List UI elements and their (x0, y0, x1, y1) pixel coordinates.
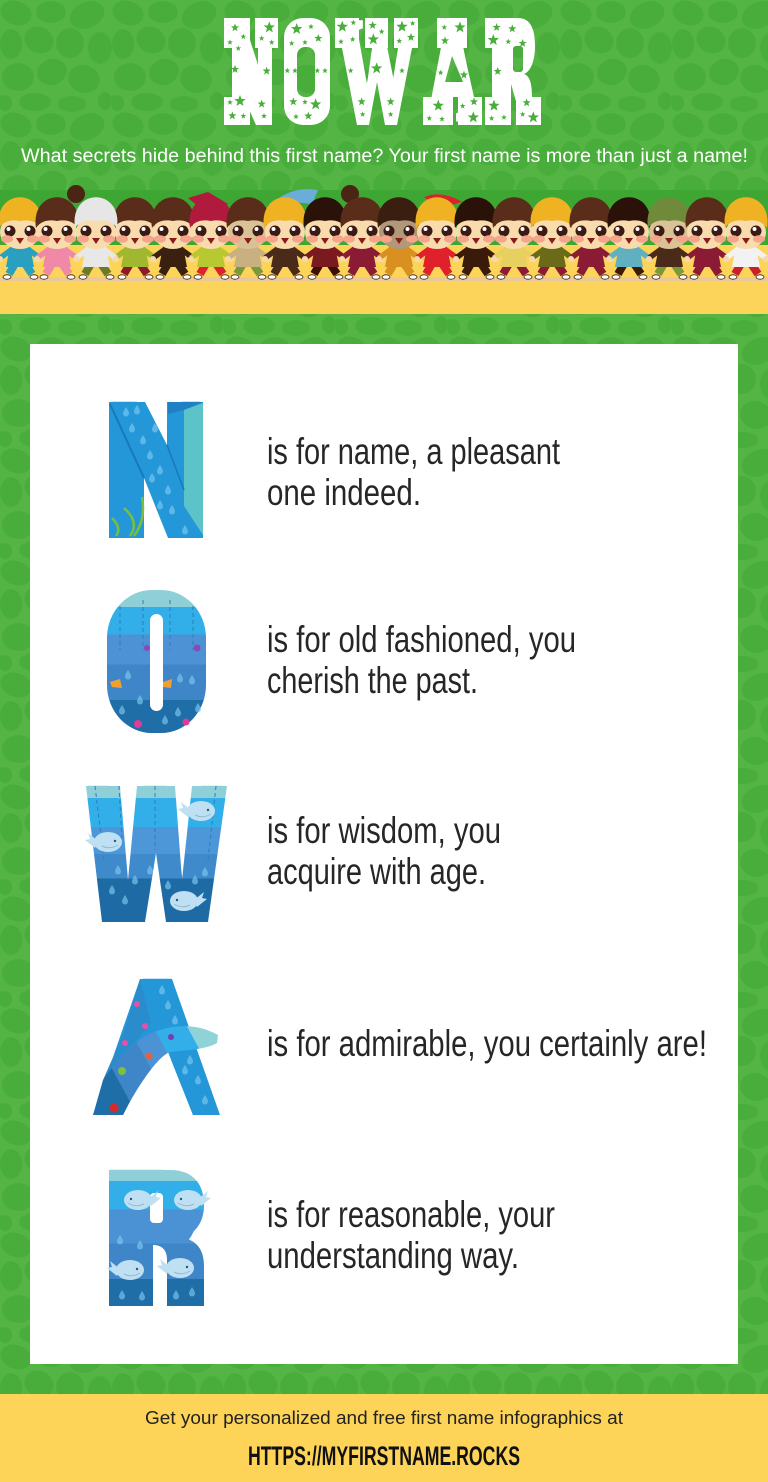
text: W line (267, 809, 501, 892)
text: W line: acquire with age. (267, 850, 486, 892)
A left leg shade (103, 979, 151, 1080)
text: R line: understanding way. (267, 1234, 519, 1276)
letter A illustration: A (97, 935, 217, 1157)
title stars (227, 20, 539, 122)
O dashed stitches (120, 600, 193, 650)
row of cartoon children (0, 197, 768, 279)
letter R illustration: R (100, 1126, 206, 1348)
A arch (93, 1026, 218, 1115)
W dashed stitches (95, 786, 216, 860)
text: O line: cherish the past. (267, 659, 478, 701)
text: W line: is for wisdom, you (267, 809, 501, 851)
text: N line (267, 430, 560, 513)
hair buns and hats behind the children (67, 185, 462, 212)
A legs (93, 979, 220, 1115)
O counter (150, 614, 163, 711)
title (224, 0, 541, 154)
text: R line (267, 1193, 555, 1276)
N raindrops (123, 405, 188, 534)
W whales and drops (85, 801, 215, 911)
O fish and drops (110, 644, 201, 728)
A white under arch (123, 1052, 193, 1115)
A decorations (110, 985, 208, 1112)
subtitle: What secrets hide behind this first name? Your first name is more than just a name! (21, 146, 748, 167)
footer panel (0, 1394, 768, 1482)
N seaweed (112, 497, 143, 536)
footer caption: Get your personalized and free first name infographics at (145, 1408, 623, 1428)
characters banner (0, 185, 768, 314)
N dark fold (168, 402, 203, 414)
text: R line: is for reasonable, your (267, 1193, 555, 1235)
footer url: HTTPS://MYFIRSTNAME.ROCKS (248, 1441, 520, 1471)
letter N illustration: N (102, 360, 211, 581)
R whales and drops (107, 1190, 211, 1300)
R counter (150, 1193, 163, 1223)
text: N line: is for name, a pleasant (267, 430, 560, 472)
text: O line: is for old fashioned, you (267, 618, 576, 660)
text: N line: one indeed. (267, 471, 421, 513)
text: O line (267, 618, 576, 701)
R notch (153, 1245, 167, 1306)
N teal fold (184, 403, 203, 535)
white content panel (30, 344, 738, 1364)
letter O illustration: O (103, 551, 197, 772)
letter W illustration: W (88, 743, 223, 964)
